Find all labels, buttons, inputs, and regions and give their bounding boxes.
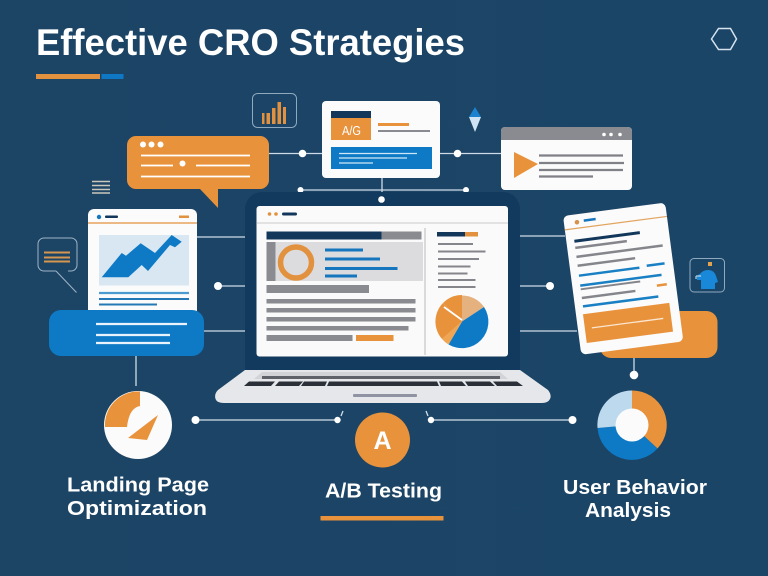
title underline <box>36 74 124 79</box>
laptop screen <box>256 206 508 356</box>
icon: A/B testing circle <box>355 412 410 468</box>
speech bubble <box>127 136 269 208</box>
keyboard base <box>215 370 551 403</box>
laptop bezel <box>245 192 520 370</box>
label: landing page optimization: Landing Page <box>67 474 209 496</box>
icon: landing page gauge <box>104 391 172 459</box>
dashboard hero panel <box>266 242 423 281</box>
orange panel <box>600 311 718 358</box>
card: analysis document <box>563 203 683 355</box>
small chat bubble <box>38 238 77 292</box>
card: A/B test window: A/G <box>342 123 361 138</box>
icon: A/B testing circle: A <box>373 427 392 455</box>
label: user behavior analysis <box>563 477 707 522</box>
icon: user head <box>690 258 724 292</box>
text lines <box>266 285 416 341</box>
connector: right <box>426 411 576 424</box>
icon: diamond <box>469 107 481 132</box>
dashboard top bar <box>266 232 422 240</box>
screen header <box>257 212 508 223</box>
label: user behavior analysis: Analysis <box>585 500 671 522</box>
blue panel <box>49 310 204 356</box>
laptop <box>215 192 551 403</box>
icon: hexagon <box>712 28 736 50</box>
title: Effective CRO Strategies <box>36 22 465 63</box>
pie chart <box>435 295 488 348</box>
connector lines <box>136 150 638 386</box>
icon: menu lines <box>92 182 110 193</box>
connector: left <box>192 411 343 424</box>
label: landing page optimization <box>67 474 209 520</box>
label: user behavior analysis: User Behavior <box>563 477 707 499</box>
label: landing page optimization: Optimization <box>67 498 207 520</box>
card: landing page <box>88 209 197 321</box>
a/b testing underline <box>320 516 444 520</box>
card: video window <box>501 127 632 190</box>
card: A/B test window <box>322 101 440 178</box>
sidebar text <box>437 232 486 287</box>
icon: bar chart <box>252 94 296 128</box>
label: a/b testing: A/B Testing <box>325 480 442 502</box>
icon: user behavior donut <box>597 390 667 460</box>
laptop camera <box>378 196 385 203</box>
